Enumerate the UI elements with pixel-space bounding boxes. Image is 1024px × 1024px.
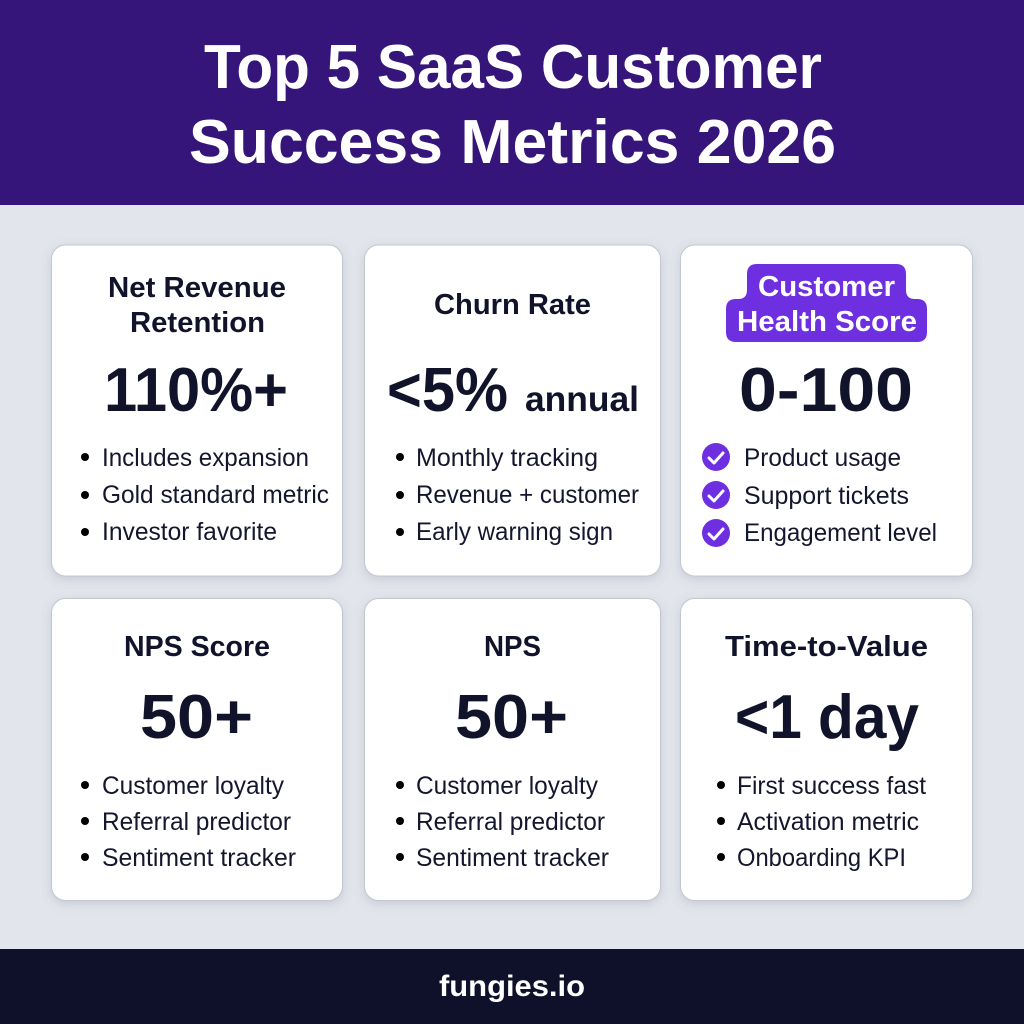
panel: churn rate (364, 245, 660, 576)
metric value: 50+ (455, 683, 568, 752)
heading (108, 272, 286, 339)
metric value: 0-100 (739, 356, 913, 425)
bullet list (396, 772, 609, 872)
bullet list: Early warning sign (416, 518, 613, 546)
bullet list (81, 444, 329, 546)
icon: check (702, 481, 730, 509)
highlighted heading badge (726, 264, 927, 342)
bullet list: Customer loyalty (416, 772, 598, 800)
metric value: <1 day (735, 683, 919, 752)
bullet list: Gold standard metric (102, 481, 329, 509)
metric value: 50+ (140, 683, 253, 752)
bullet list (717, 772, 926, 872)
title (189, 33, 836, 177)
checklist: Engagement level (744, 519, 937, 547)
metric value (387, 356, 639, 425)
highlighted heading badge: Health Score (737, 306, 917, 338)
metric value: 110%+ (104, 356, 288, 425)
metric value: <5% (387, 356, 508, 425)
bullet list: Investor favorite (102, 518, 277, 546)
bullet list: Activation metric (737, 808, 919, 836)
title: Top 5 SaaS Customer (204, 33, 822, 102)
title: Success Metrics 2026 (189, 108, 836, 177)
bullet list (81, 772, 296, 872)
bullet list (396, 444, 639, 546)
bullet list: Includes expansion (102, 444, 309, 472)
bullet list: Customer loyalty (102, 772, 284, 800)
heading: NPS (484, 631, 541, 663)
heading: NPS Score (124, 631, 270, 663)
bullet list: Onboarding KPI (737, 844, 906, 872)
panel: nps (364, 598, 660, 900)
metric value: annual (525, 380, 639, 419)
bullet list: Revenue + customer (416, 481, 639, 509)
icon: check (702, 519, 730, 547)
checklist: Product usage (744, 444, 901, 472)
bullet list: Sentiment tracker (102, 844, 296, 872)
bullet list: Monthly tracking (416, 444, 598, 472)
heading: Time-to-Value (725, 631, 928, 663)
bullet list: Sentiment tracker (416, 844, 609, 872)
panel: net revenue retention (52, 245, 342, 576)
heading: Net Revenue (108, 272, 286, 304)
panel: nps score (52, 598, 342, 900)
icon: check (702, 443, 730, 471)
footer brand: fungies.io (439, 970, 585, 1003)
heading: Retention (130, 307, 265, 339)
bullet list: First success fast (737, 772, 926, 800)
checklist (702, 443, 937, 547)
bullet list: Referral predictor (102, 808, 291, 836)
footer bar (0, 949, 1024, 1024)
header banner (0, 0, 1024, 205)
highlighted heading badge: Customer (758, 271, 895, 303)
checklist: Support tickets (744, 482, 909, 510)
panel: time-to-value (680, 598, 972, 900)
panel: customer health score (680, 245, 972, 576)
bullet list: Referral predictor (416, 808, 605, 836)
heading: Churn Rate (434, 289, 591, 321)
